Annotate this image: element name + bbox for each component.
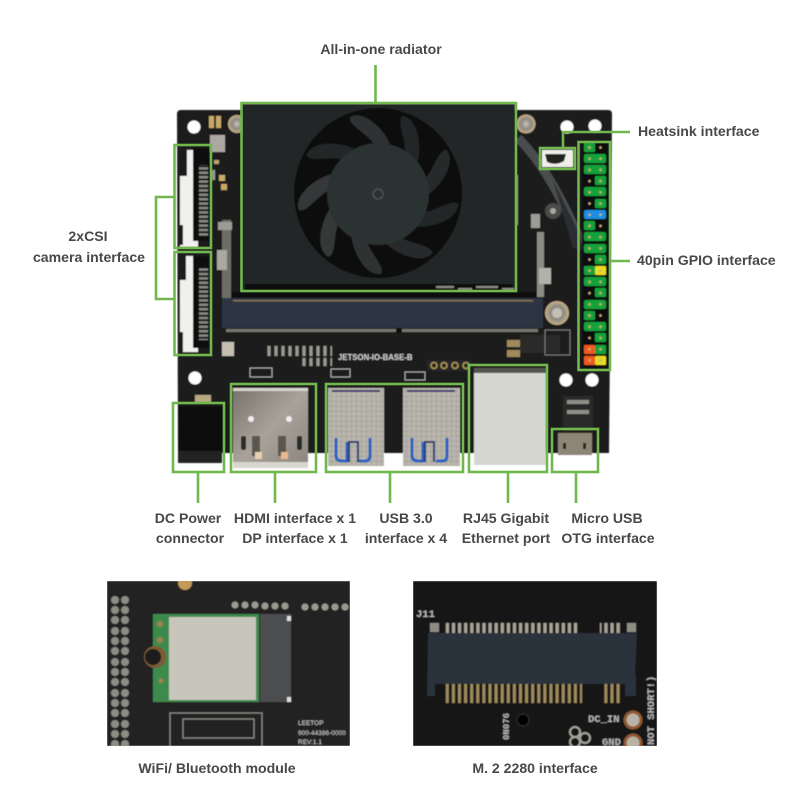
slot corners: [430, 623, 439, 632]
fan: [294, 108, 462, 278]
via hole: [517, 714, 529, 726]
micro USB port: [558, 433, 592, 455]
frame: USB 3.0: [326, 384, 463, 472]
board label: LEETOP: [298, 720, 324, 727]
RJ45 port: [474, 368, 546, 465]
photo: M.2 2280 slot: 0N076: [502, 713, 512, 740]
mounting holes: [188, 120, 602, 386]
label: USB 3.0: interface x 4: [365, 530, 447, 546]
frame: CSI camera connectors: [174, 145, 211, 355]
label: Heatsink interface: Heatsink interface: [638, 123, 760, 139]
GPIO header pins: [582, 142, 608, 368]
label: HDMI and DP: HDMI interface x 1: [234, 510, 356, 526]
leader: heatsink: [563, 132, 630, 148]
label: All-in-one radiator: All-in-one radiator: [320, 41, 442, 57]
label: 40pin GPIO interface: 40pin GPIO interface: [637, 252, 776, 268]
memory socket: [222, 292, 544, 333]
silkscreen J11: J11: [416, 609, 435, 621]
label: RJ45: Ethernet port: [462, 530, 551, 546]
pads and silkscreen: DC_IN: [588, 714, 620, 726]
label: 2xCSI camera interface: camera interface: [33, 249, 145, 265]
label: DC Power connector: DC Power: [155, 510, 222, 526]
top pins: [443, 623, 580, 634]
leader: radiator: [374, 65, 377, 103]
small parts top left: [209, 116, 227, 190]
callout frame: All-in-one radiator: [242, 103, 516, 291]
fan connector: [542, 150, 573, 167]
antenna pads: [157, 621, 164, 684]
label: Micro USB OTG: OTG interface: [561, 530, 655, 546]
frame: heatsink connector: [540, 148, 575, 169]
board label: REV:1.1: [298, 739, 322, 746]
header strip and silkscreen: JETSON-IO-BASE-B: [338, 353, 413, 362]
label: HDMI and DP: DP interface x 1: [242, 530, 348, 546]
leader: GPIO: [610, 260, 630, 262]
DC jack: [178, 395, 223, 463]
M.2 slot: [260, 614, 291, 702]
USB port right: [403, 388, 460, 466]
header strip and silkscreen: [222, 330, 593, 431]
module PCB: [153, 614, 259, 702]
HDMI DP port: [233, 388, 308, 468]
top solder dots: [232, 602, 348, 610]
heatsink cable: [518, 138, 583, 247]
label: M.2 2280: M. 2 2280 interface: [472, 760, 598, 776]
label: USB 3.0: USB 3.0: [379, 510, 433, 526]
module SMD strip: [436, 175, 518, 290]
frame: micro USB: [552, 429, 598, 472]
camera connector 2: [178, 256, 209, 352]
USB port left: [328, 388, 384, 466]
frame: HDMI and DP: [231, 384, 316, 472]
pin columns: [111, 596, 129, 748]
module shield: [169, 617, 256, 700]
brass pad: [177, 581, 193, 591]
heatsink module: [242, 104, 515, 290]
frame: DC jack: [173, 403, 224, 472]
label: WiFi Bluetooth: WiFi/ Bluetooth module: [138, 760, 296, 776]
triple circles: [570, 727, 590, 747]
board label: 900-44386-0000: [298, 730, 346, 737]
photo: M.2 2280 slot: [413, 581, 658, 751]
label: Micro USB OTG: Micro USB: [571, 510, 643, 526]
vertical silkscreen: NOT SHORT!): [646, 676, 658, 745]
leader: CSI bracket: [156, 197, 174, 299]
board photo: [177, 104, 612, 468]
label: DC Power connector: connector: [156, 530, 225, 546]
label: RJ45: RJ45 Gigabit: [463, 510, 549, 526]
slot body: [427, 633, 637, 696]
leaders: bottom ports: [198, 472, 576, 503]
silkscreen rectangles: [170, 713, 262, 747]
socket latches: [217, 214, 551, 298]
screw: [144, 646, 166, 668]
frame: GPIO header: [578, 142, 610, 370]
photo: M.2 2280 slot: GND: [602, 737, 621, 749]
label: 2xCSI camera interface: 2xCSI: [68, 228, 108, 244]
photo: WiFi Bluetooth module: [107, 576, 350, 748]
bottom pins: [445, 683, 582, 703]
camera connector 1: [178, 148, 209, 247]
frame: RJ45: [469, 365, 547, 472]
board body: [177, 110, 612, 453]
screws: [228, 114, 569, 325]
